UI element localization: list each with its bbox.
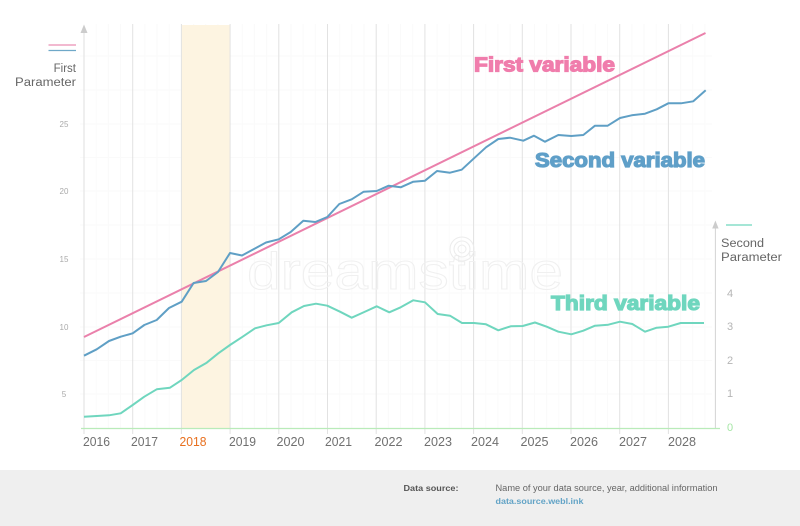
year labels: 2022 <box>374 435 403 449</box>
legend: first parameter <box>15 45 77 89</box>
year labels: 2017 <box>131 435 158 449</box>
baseline axis <box>81 428 720 430</box>
left axis tick labels: 5 <box>62 390 67 399</box>
data source description: Name of your data source, year, additional information <box>496 483 718 493</box>
right axis tick labels: 1 <box>727 388 733 400</box>
label: third variable: Third variable <box>551 293 700 315</box>
label: first variable: First variable <box>474 54 615 76</box>
watermark: dreamstime <box>247 243 563 301</box>
year labels: 2024 <box>471 435 499 449</box>
year labels: 2027 <box>619 435 647 449</box>
left axis tick labels: 10 <box>60 323 69 332</box>
year labels: 2023 <box>424 435 452 449</box>
legend: first parameter: Parameter <box>15 77 76 89</box>
right axis tick labels: 2 <box>727 355 733 367</box>
year labels: 2028 <box>668 435 696 449</box>
year labels: 2019 <box>229 435 256 449</box>
year labels: 2021 <box>325 435 352 449</box>
legend: second parameter <box>721 225 782 264</box>
label: second variable: Second variable <box>535 150 705 172</box>
footer panel <box>0 470 800 526</box>
right axis with arrow <box>712 220 719 429</box>
year labels: 2018 <box>180 435 207 449</box>
left axis tick labels <box>60 120 69 399</box>
left axis with arrow <box>80 24 88 434</box>
highlighted 2018 band <box>181 25 230 428</box>
right axis tick labels: 3 <box>727 321 733 333</box>
legend: first parameter: First <box>54 63 77 75</box>
year labels: 2026 <box>570 435 598 449</box>
legend: second parameter: Parameter <box>721 252 782 264</box>
left axis tick labels: 25 <box>60 120 69 129</box>
year labels <box>83 435 696 449</box>
data source link: data.source.webl.ink <box>496 496 584 506</box>
series: third variable line <box>84 300 704 417</box>
year labels: 2020 <box>276 435 305 449</box>
year labels: 2016 <box>83 435 110 449</box>
right axis tick labels: 0 <box>727 422 733 434</box>
data source label: Data source: <box>404 483 459 493</box>
legend: second parameter: Second <box>721 238 764 250</box>
left axis tick labels: 15 <box>60 255 69 264</box>
right axis tick labels <box>727 288 733 434</box>
year labels: 2025 <box>520 435 549 449</box>
series: second variable line <box>84 90 706 356</box>
right axis tick labels: 4 <box>727 288 733 300</box>
series: first variable line <box>84 33 706 337</box>
left axis tick labels: 20 <box>60 187 69 196</box>
